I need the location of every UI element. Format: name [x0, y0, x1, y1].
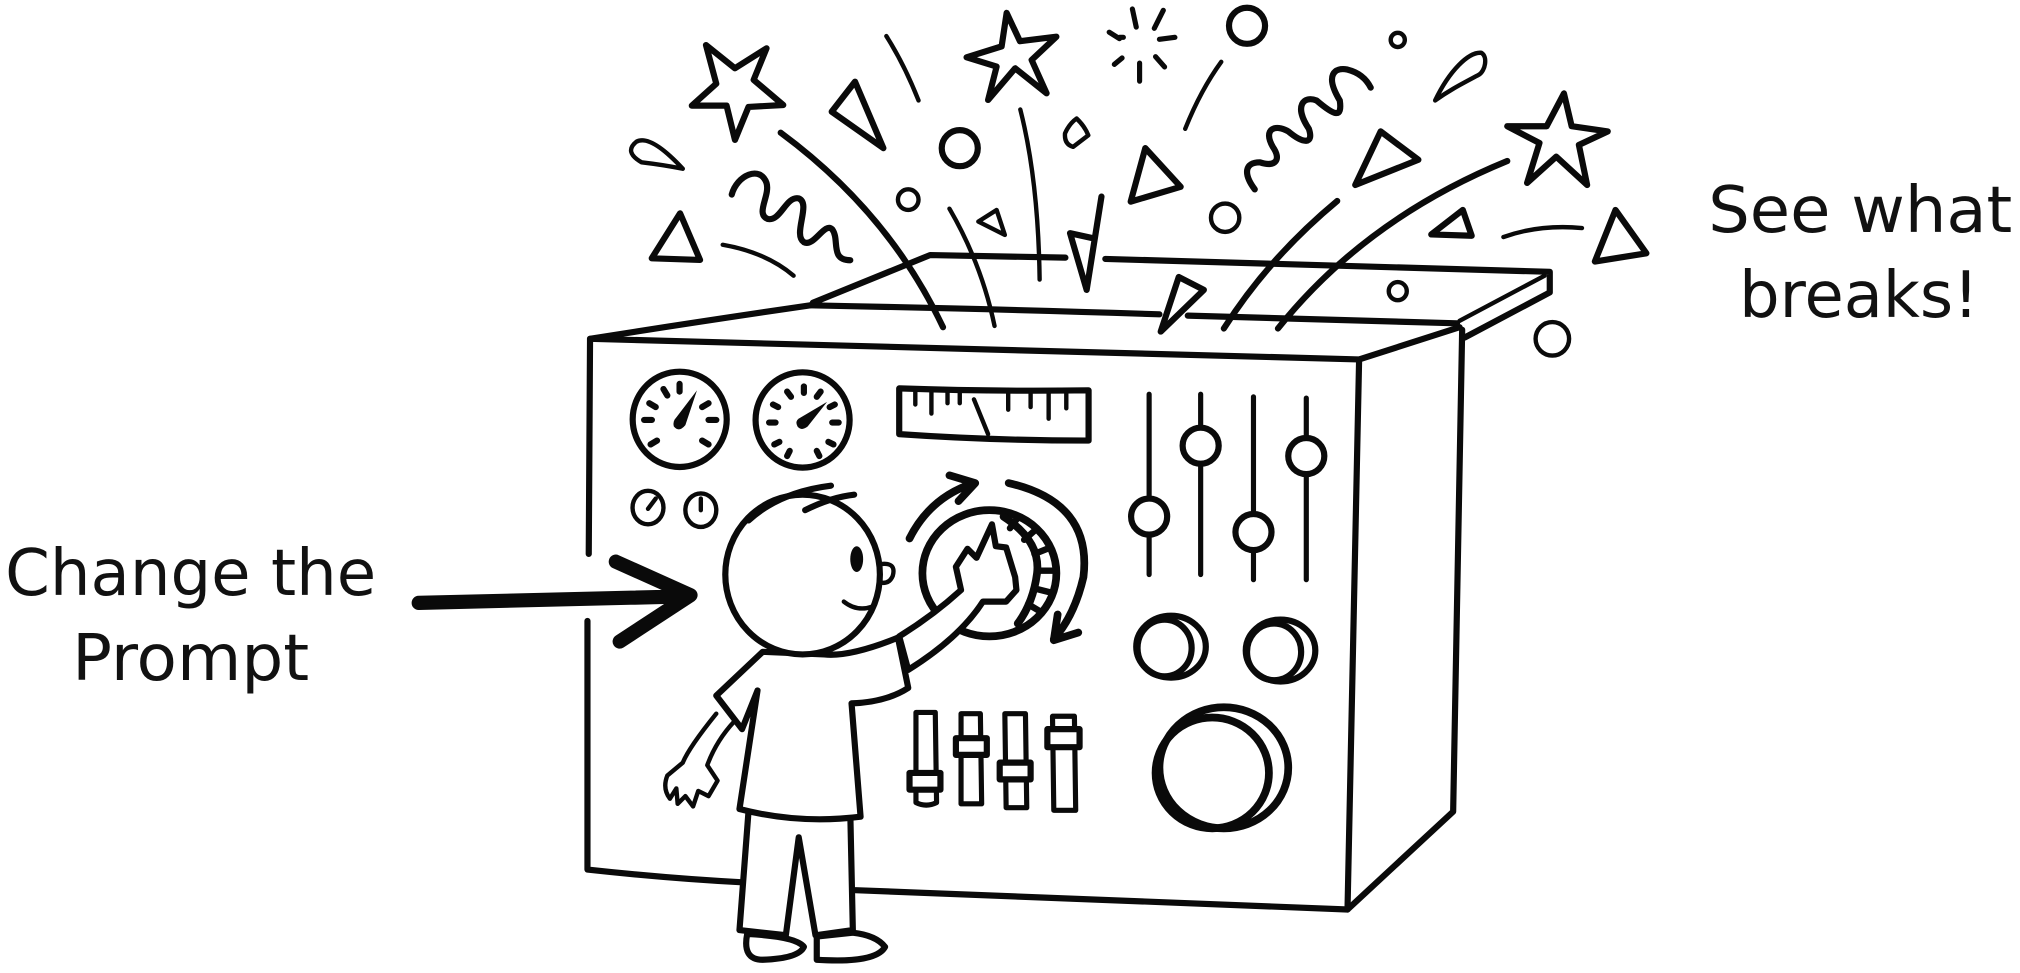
scale meter — [899, 388, 1089, 441]
back rim of box — [810, 305, 1457, 323]
left arm — [665, 714, 734, 806]
legs and shoes — [739, 812, 885, 960]
open lid — [813, 255, 1550, 338]
vertical sliders — [1131, 394, 1324, 580]
shirt — [716, 638, 908, 819]
needle — [796, 402, 827, 429]
round buttons — [1136, 616, 1315, 681]
small gauges — [633, 491, 716, 527]
label: change the prompt: Change the — [5, 536, 376, 611]
teardrops — [631, 140, 683, 169]
large knob — [1156, 707, 1288, 828]
side face — [1348, 330, 1462, 909]
rotating dial with arrows — [910, 475, 1084, 640]
left gauge — [633, 372, 727, 467]
squiggles — [732, 174, 850, 260]
machine box — [587, 255, 1550, 909]
streaks — [781, 133, 943, 327]
head — [725, 495, 880, 654]
explosion of confetti — [631, 8, 1646, 356]
label: change the prompt — [5, 536, 376, 696]
top front edge — [590, 305, 1460, 359]
label: change the prompt: Prompt — [72, 621, 309, 696]
right gauge — [756, 372, 850, 468]
triangles — [652, 213, 700, 260]
face — [850, 546, 863, 572]
front face — [587, 339, 1359, 909]
raised arm and hand — [899, 524, 1016, 670]
small fader bank — [910, 712, 1080, 810]
curved arrows — [910, 475, 975, 538]
person — [665, 486, 1016, 960]
needle — [673, 390, 697, 429]
dial — [922, 510, 1056, 636]
big arrow — [419, 562, 691, 642]
burst — [1109, 9, 1175, 81]
label: see what breaks: See what — [1708, 173, 2012, 248]
circles — [1229, 8, 1265, 44]
gauge dials — [633, 372, 850, 527]
label: see what breaks — [1708, 173, 2012, 333]
stars — [692, 45, 783, 140]
label: see what breaks: breaks! — [1739, 258, 1979, 333]
